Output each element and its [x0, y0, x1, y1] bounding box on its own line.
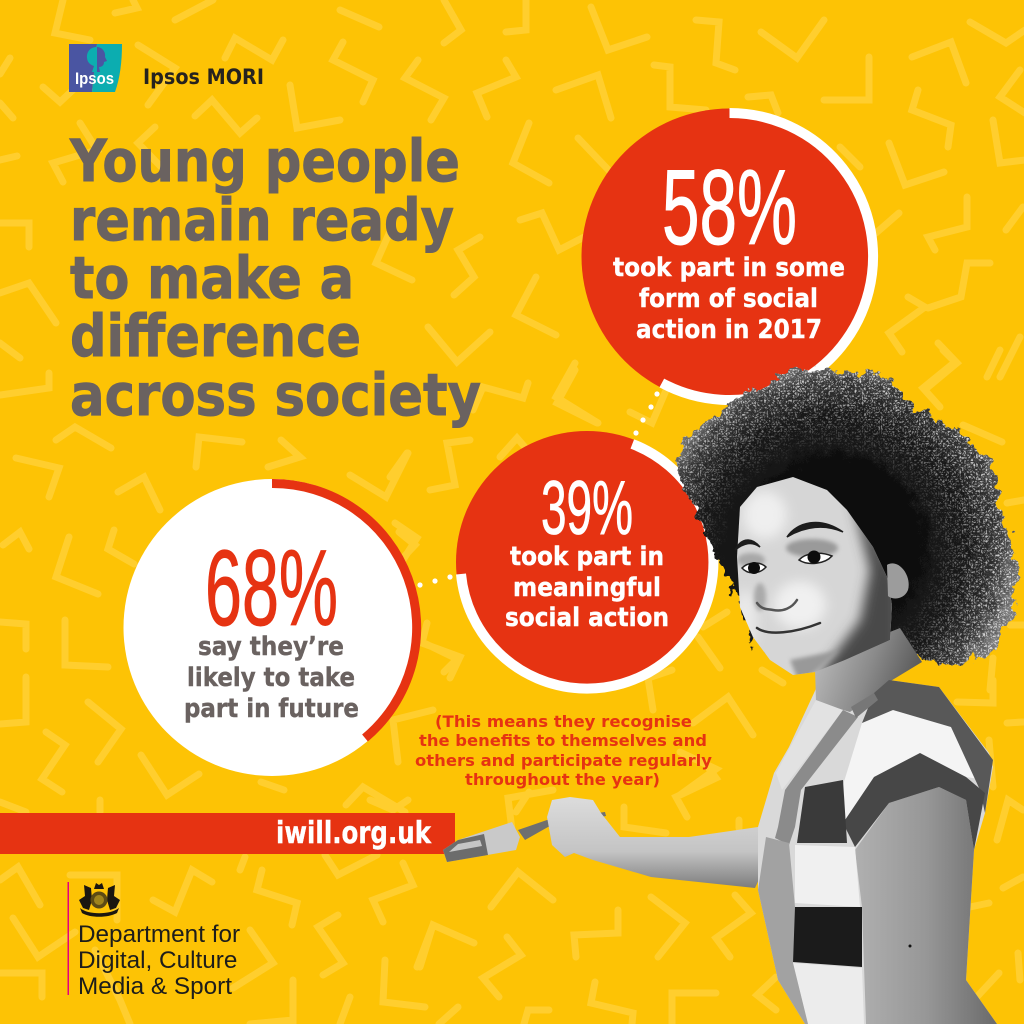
- logo: Ipsos: [69, 44, 122, 92]
- sleeve cuff: [843, 753, 985, 850]
- progress ring: [662, 113, 873, 400]
- explanatory note: (This means they recognise: [435, 712, 692, 731]
- stat number: 39%: [541, 466, 633, 551]
- stat description: meaningful: [513, 573, 661, 603]
- explanatory note: [415, 712, 713, 789]
- stat description: say they’re: [198, 632, 344, 662]
- department name: Department for: [78, 921, 240, 948]
- website banner: [0, 813, 455, 854]
- icon: royal crest: [79, 883, 120, 917]
- forearm and hand: [547, 797, 768, 888]
- title: to make a: [70, 244, 354, 312]
- title: Young people: [69, 127, 460, 195]
- explanatory note: others and participate regularly: [415, 751, 713, 770]
- mole: [908, 944, 912, 948]
- stat description: likely to take: [187, 663, 355, 693]
- title: difference: [70, 302, 361, 370]
- explanatory note: throughout the year): [465, 770, 660, 789]
- department name: [78, 921, 240, 1000]
- panel: 39% stat circle: [456, 431, 718, 693]
- DCMS logo: [68, 882, 240, 1000]
- stat description: took part in: [510, 542, 664, 572]
- stat description: [184, 632, 359, 724]
- connector dots: 39% to 68%: [403, 574, 453, 591]
- panel: 68% stat circle: [124, 479, 420, 776]
- shirt upper white: [843, 710, 985, 825]
- stat description: took part in some: [613, 253, 845, 283]
- hair base: [677, 368, 1018, 665]
- eyebrows: [735, 523, 843, 550]
- nose: [757, 600, 797, 611]
- stat description: [613, 253, 845, 345]
- shirt stripes: [793, 780, 864, 1024]
- stat description: part in future: [184, 694, 359, 724]
- torso base: [758, 680, 997, 1024]
- neck: [815, 628, 922, 712]
- hair curls: [677, 368, 1018, 665]
- connector dots: 58% to 39%: [626, 391, 660, 449]
- brand name: Ipsos MORI: Ipsos MORI: [143, 65, 264, 89]
- department name: Media & Sport: [78, 973, 232, 1000]
- stat description: social action: [505, 603, 669, 633]
- brush head: [443, 822, 520, 862]
- icon: head silhouette: [87, 47, 107, 72]
- eyes: [742, 550, 832, 574]
- overall strap: [775, 710, 858, 845]
- stat description: action in 2017: [636, 315, 822, 345]
- progress ring: [272, 483, 417, 738]
- progress ring: [461, 444, 713, 689]
- panel: 58% stat circle: [582, 108, 878, 404]
- title: across society: [70, 361, 481, 429]
- upper arm: [855, 787, 997, 1024]
- ear: [887, 563, 909, 598]
- stat description: [505, 542, 669, 633]
- stat description: form of social: [639, 284, 818, 314]
- mouth: [757, 623, 820, 633]
- face: [737, 477, 892, 675]
- stat number: 58%: [662, 147, 797, 267]
- website url: iwill.org.uk: [276, 816, 432, 851]
- brush handle: [518, 812, 606, 840]
- logo wordmark: Ipsos: [75, 69, 114, 88]
- explanatory note: the benefits to themselves and: [419, 731, 707, 750]
- overall bib: [758, 837, 808, 1024]
- strap buckle: [851, 693, 878, 718]
- V-neck chest: [776, 700, 843, 790]
- stat number: 68%: [205, 527, 338, 648]
- title: [69, 127, 481, 429]
- title: remain ready: [70, 186, 454, 254]
- back strap: [862, 680, 993, 813]
- photo: girl with paintbrush: [443, 368, 1018, 1024]
- department name: Digital, Culture: [78, 947, 237, 974]
